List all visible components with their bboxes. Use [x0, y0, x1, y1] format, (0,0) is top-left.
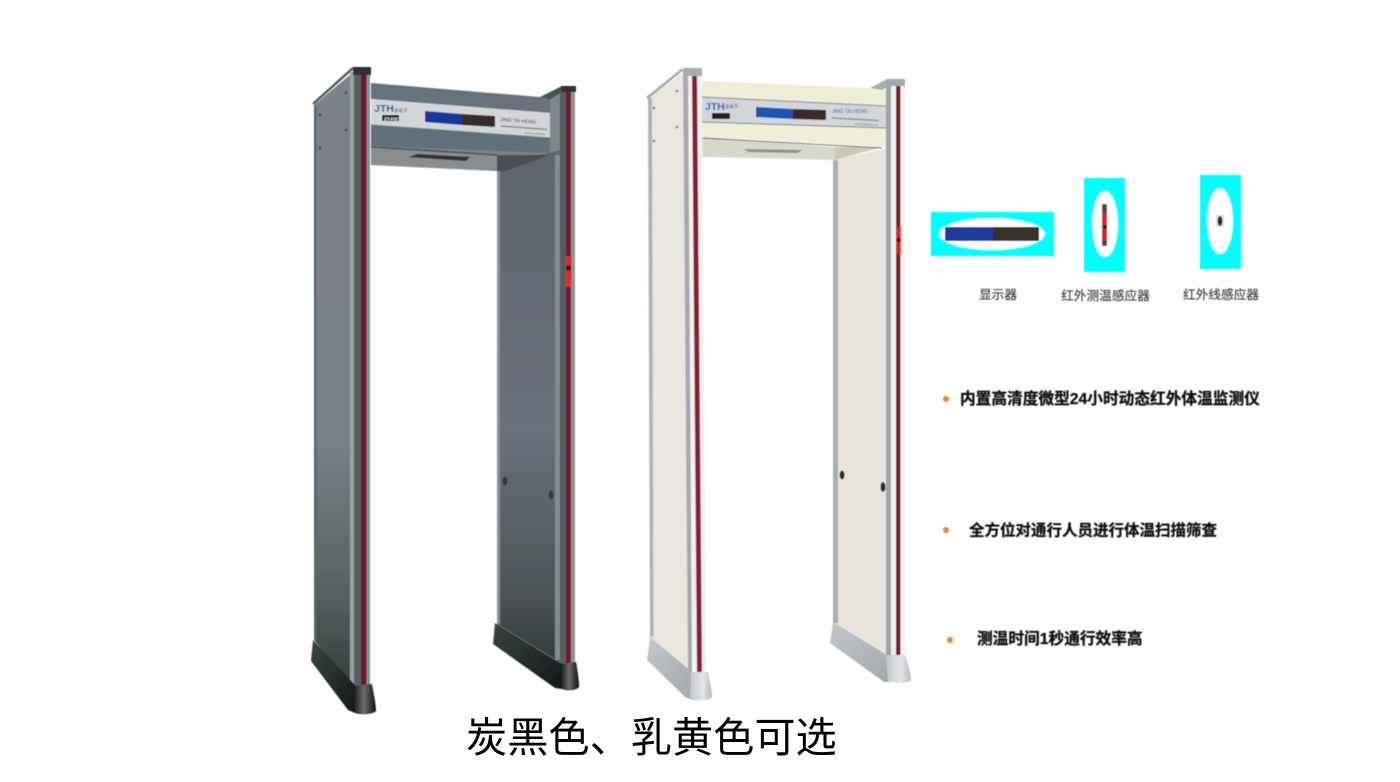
- crossbar: glass end: [550, 92, 562, 155]
- right inner panel: [497, 150, 561, 663]
- crossbar: top face: [702, 81, 886, 106]
- right base: [493, 623, 579, 690]
- icon: infrared temperature sensor detail: [1084, 178, 1125, 272]
- right pillar: [870, 79, 905, 656]
- crossbar: lower face and underside: [702, 122, 886, 160]
- caption: 炭黑色、乳黄色可选: [466, 715, 837, 761]
- front display panel: 金泰亨: [725, 103, 739, 109]
- crossbar: top face: [371, 83, 550, 113]
- label: infrared temperature sensor: 红外测温感应器: [1061, 288, 1150, 303]
- crossbar: lower face and underside: [371, 125, 550, 171]
- label: infrared sensor: 红外线感应器: [1183, 287, 1259, 302]
- charcoal black gate: [311, 67, 579, 714]
- label: display: 显示器: [979, 288, 1017, 302]
- cream yellow gate: [647, 68, 911, 701]
- bullet 2: 全方位对通行人员进行体温扫描筛查: [969, 520, 1218, 540]
- side rivets and holes: [318, 92, 553, 500]
- left base: [647, 637, 712, 701]
- front display panel: JING TAI HENG: [500, 117, 536, 126]
- front display panel: [702, 97, 886, 128]
- bullet 1: 内置高清度微型24小时动态红外体温监测仪: [960, 389, 1260, 408]
- right pillar: [540, 86, 576, 664]
- icon: display detail: [931, 212, 1054, 256]
- front display panel: JING TAI HENG: [832, 109, 868, 115]
- front display panel: JTH: [374, 103, 394, 115]
- icon: infrared sensor detail: [1200, 175, 1241, 269]
- left side panel: [314, 74, 351, 685]
- bullet 3: 测温时间1秒通行效率高: [977, 629, 1143, 648]
- front display panel: 金泰亨: [394, 107, 408, 113]
- front display panel: JTH: [705, 101, 725, 113]
- left side panel: [648, 72, 688, 672]
- front display panel: ZT-FW: [384, 116, 398, 122]
- right base: [830, 622, 911, 683]
- left pillar: [683, 68, 706, 673]
- side rivets and holes: [653, 90, 886, 492]
- right inner panel: [833, 148, 887, 655]
- front display panel: [371, 99, 550, 138]
- left base: [311, 640, 376, 714]
- left pillar: [350, 67, 371, 686]
